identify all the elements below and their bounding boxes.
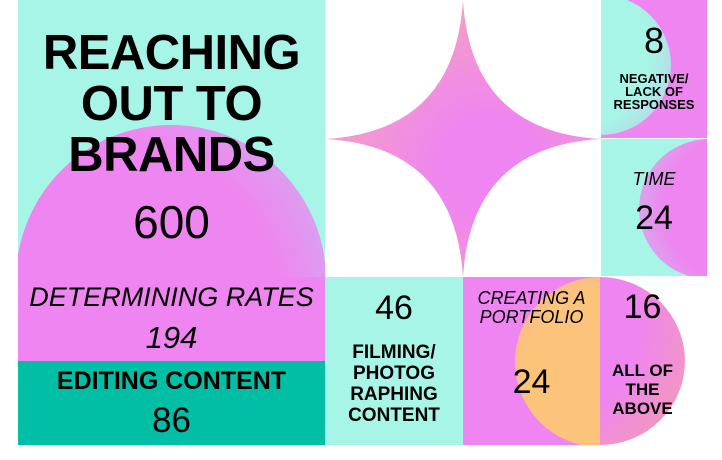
panel: time: TIME: [632, 169, 676, 189]
panel: negative responses: 8: [644, 20, 664, 61]
panel: editing content: EDITING CONTENT: [57, 367, 286, 395]
panel: filming: CONTENT: [348, 405, 440, 426]
panel: editing content: [18, 361, 325, 445]
panel: editing content: 86: [152, 401, 191, 440]
heading: [43, 26, 300, 182]
panel: time: [601, 139, 707, 276]
panel: time: 24: [635, 199, 673, 237]
panel: creating a portfolio: PORTFOLIO: [480, 307, 583, 327]
panel: negative responses: [601, 0, 707, 138]
panel: creating a portfolio: CREATING A: [477, 288, 586, 308]
panel: all of the above: ALL OF: [612, 361, 673, 380]
panel: negative responses: NEGATIVE/: [619, 71, 689, 86]
decorative semicircle: [16, 125, 326, 435]
panel: negative responses: RESPONSES: [614, 97, 694, 112]
panel: determining rates: 194: [146, 320, 197, 355]
panel: all of the above: THE: [626, 380, 660, 399]
panel: filming: PHOTOG: [353, 363, 435, 384]
panel: filming: 46: [375, 289, 413, 327]
panel: creating a portfolio: [463, 277, 600, 445]
panel: filming: [325, 277, 463, 445]
heading: REACHING: [43, 26, 300, 80]
heading: BRANDS: [68, 128, 275, 182]
heading: OUT TO: [81, 77, 262, 131]
icon: star: [326, 0, 600, 276]
panel: all of the above: 16: [624, 288, 661, 326]
panel: filming: RAPHING: [350, 384, 438, 405]
panel: all of the above: ABOVE: [612, 399, 673, 418]
panel: filming: FILMING/: [352, 342, 436, 363]
panel: reaching out to brands: [18, 0, 325, 277]
panel: determining rates: DETERMINING RATES: [29, 282, 314, 312]
panel: creating a portfolio: 24: [513, 363, 550, 401]
panel: determining rates: [18, 277, 325, 361]
panel: all of the above: [600, 277, 685, 445]
value: 600: [133, 196, 210, 248]
panel: negative responses: LACK OF: [625, 84, 683, 99]
